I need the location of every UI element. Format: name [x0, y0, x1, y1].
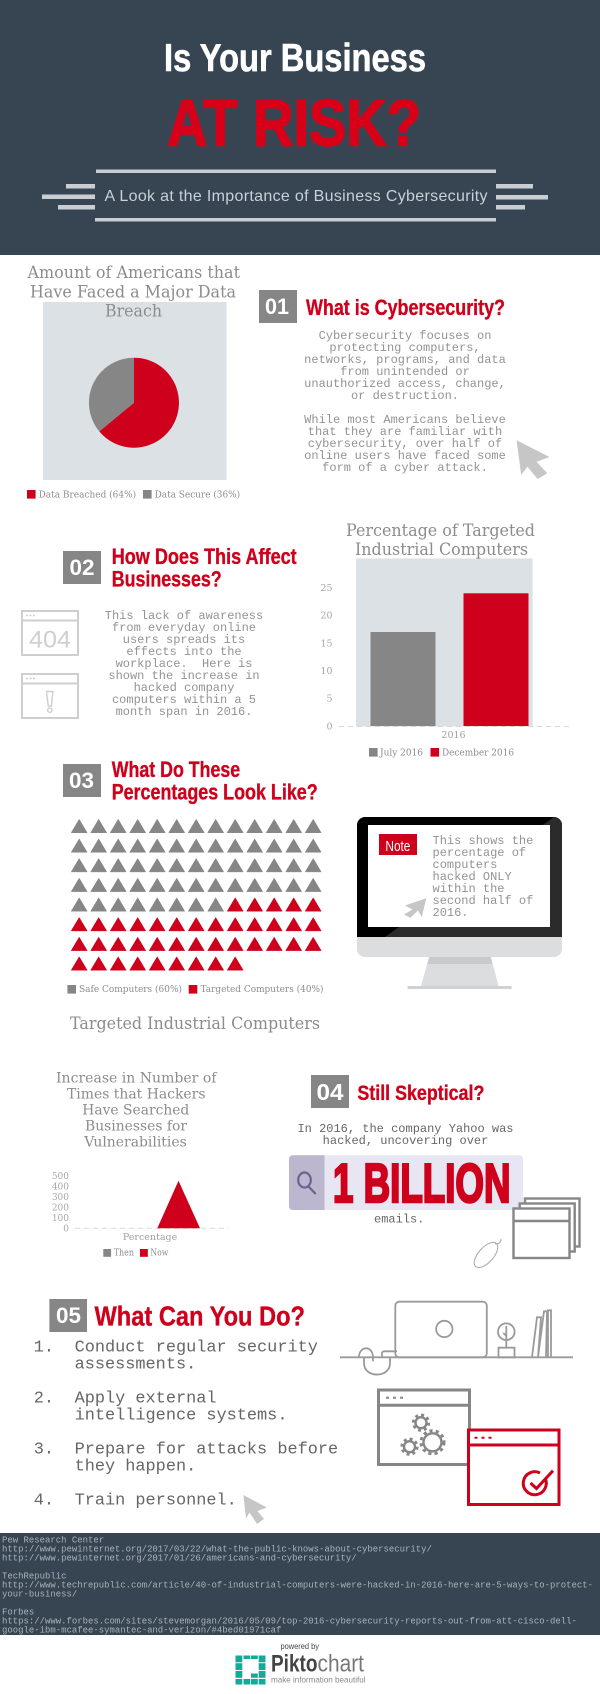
triangle chart title: Businesses for: [85, 1119, 187, 1135]
illustration: settings window: [378, 1390, 470, 1464]
icon: stacked windows: [514, 1198, 580, 1258]
triangle chart x label: Percentage: [123, 1232, 178, 1243]
monitor chin: [357, 937, 562, 957]
section 01 body text: While most Americans believe: [304, 413, 506, 427]
section 01 body text: [304, 329, 506, 475]
source list: https://www.forbes.com/sites/stevemorgan/2016/05/09/top-2016-cybersecurity-reports-out-from-att-cisco-dell-: [2, 1616, 577, 1626]
piktochart logo: chart: [318, 1651, 364, 1678]
note text: This shows the: [432, 834, 533, 848]
note text: within the: [432, 882, 505, 896]
section 03 heading: [63, 757, 318, 804]
chart background: [43, 302, 226, 480]
section 01 body text: form of a cyber attack.: [322, 461, 488, 475]
section 04 intro text: hacked, uncovering over: [323, 1134, 488, 1148]
y axis labels: 10: [320, 666, 332, 677]
title line 1: Is Your Business: [164, 37, 426, 80]
section 01 heading: [259, 290, 505, 323]
section 01 body text: networks, programs, and data: [304, 353, 506, 367]
section 01 body text: from unintended or: [340, 365, 470, 379]
piktochart logo: [236, 1642, 366, 1685]
pie chart title: Breach: [105, 302, 162, 320]
note text: 2016.: [432, 906, 469, 920]
section 02 body text: from everyday online: [112, 621, 256, 635]
section 02 body text: shown the increase in: [108, 669, 260, 683]
note text: second half of: [432, 894, 533, 908]
section 04 intro text: In 2016, the company Yahoo was: [297, 1122, 514, 1136]
source list: http://www.pewinternet.org/2017/01/26/americans-and-cybersecurity/: [2, 1553, 357, 1563]
triangle chart axis labels: 300: [52, 1193, 69, 1203]
pie chart panel: data breaches: [27, 263, 240, 500]
pie legend: Data Breached (64%): [39, 490, 136, 500]
illustration: laptop on desk: [340, 1302, 573, 1375]
section 02 body text: users spreads its: [123, 633, 245, 647]
section 04 heading: Still Skeptical?: [357, 1082, 484, 1105]
section 01 body text: online users have faced some: [304, 449, 506, 463]
bar chart title: Percentage of Targeted: [346, 521, 535, 541]
logo mark: [236, 1656, 266, 1684]
header banner: [0, 0, 600, 255]
action list: Prepare for attacks before: [75, 1441, 338, 1460]
icon: computer mouse: [470, 1238, 502, 1272]
pie legend: [27, 490, 240, 500]
triangle chart title: Increase in Number of: [56, 1071, 218, 1087]
action list: they happen.: [75, 1458, 196, 1477]
pie chart title: Amount of Americans that: [27, 263, 240, 282]
source list: http://www.pewinternet.org/2017/03/22/what-the-public-knows-about-cybersecurity/: [2, 1544, 432, 1554]
action list: 4.: [34, 1492, 54, 1511]
triangle chart axis labels: 0: [63, 1224, 69, 1234]
action list: assessments.: [75, 1356, 196, 1375]
triangle chart: hacker searches: [52, 1071, 229, 1259]
section 05 heading: What Can You Do?: [94, 1300, 305, 1331]
logo tagline: make information beautiful: [271, 1675, 366, 1685]
source list: TechRepublic: [2, 1571, 66, 1581]
section 03 heading: What Do These: [112, 757, 240, 782]
bar chart legend: [369, 748, 514, 758]
triangle chart title: Have Searched: [82, 1103, 189, 1119]
note text: [432, 834, 533, 920]
action list: intelligence systems.: [75, 1407, 287, 1426]
bar chart background: [356, 558, 533, 726]
action list: Apply external: [75, 1390, 217, 1409]
triangle chart axis labels: 400: [52, 1182, 69, 1192]
section 01 body text: cybersecurity, over half of: [308, 437, 502, 451]
y axis labels: [320, 583, 332, 732]
triangle bar: [157, 1181, 200, 1228]
section 01 body text: or destruction.: [351, 389, 459, 403]
subtitle frame stripes: [42, 170, 548, 222]
section 01 body text: that they are familiar with: [308, 425, 502, 439]
triangle chart title: Times that Hackers: [67, 1087, 206, 1103]
source list: google-ibm-mcafee-symantec-and-verizon/#4bed01971caf: [2, 1625, 281, 1635]
section 05 heading: 05: [56, 1303, 81, 1328]
section 02 body text: effects into the: [126, 645, 242, 659]
source list: Pew Research Center: [2, 1535, 104, 1545]
note text: hacked ONLY: [432, 870, 512, 884]
section 01 body text: protecting computers,: [329, 341, 481, 355]
action list: Conduct regular security: [75, 1339, 318, 1358]
monitor screen bezel: [357, 817, 562, 937]
triangle chart title: [56, 1071, 218, 1151]
section 05 heading: [49, 1299, 305, 1332]
pie legend: Data Secure (36%): [155, 490, 240, 500]
monitor with note: [357, 817, 562, 989]
section 01 body text: unauthorized access, change,: [304, 377, 506, 391]
section 04 heading: [311, 1075, 484, 1108]
section 03 heading: Percentages Look Like?: [112, 779, 318, 804]
triangle chart axis labels: [52, 1172, 69, 1234]
action list: 3.: [34, 1441, 54, 1460]
section 02 heading: [63, 544, 297, 592]
pictogram chart title: Targeted Industrial Computers: [70, 1014, 320, 1034]
section 02 heading: How Does This Affect: [112, 544, 297, 569]
y axis labels: 5: [326, 694, 332, 704]
sources footer: [0, 1533, 600, 1635]
action list: 2.: [34, 1390, 54, 1409]
bars: [370, 593, 528, 726]
monitor stand: [408, 956, 512, 989]
icon: 404 window: [22, 611, 78, 655]
section 02 body text: computers within a 5: [112, 693, 256, 707]
triangle chart axis labels: 200: [52, 1204, 69, 1214]
section 02 body text: [105, 609, 263, 719]
section 04 heading: 04: [316, 1079, 344, 1105]
triangle chart axis labels: 500: [52, 1172, 69, 1182]
section 01 body text: Cybersecurity focuses on: [319, 329, 491, 343]
pictogram chart: triangles: [71, 819, 321, 970]
action list: 1.: [34, 1339, 54, 1358]
pictogram legend: Targeted Computers (40%): [200, 984, 324, 995]
section 01 heading: 01: [265, 294, 289, 319]
bar chart title: Industrial Computers: [355, 540, 528, 560]
icon: small cursor: [404, 898, 426, 918]
logo wordmark: Pikto: [271, 1651, 318, 1678]
action list: [34, 1339, 338, 1511]
triangle chart legend: Now: [150, 1249, 169, 1259]
action list: Train personnel.: [75, 1492, 237, 1511]
triangle chart axis labels: 100: [52, 1214, 69, 1224]
pie chart title: [27, 263, 240, 320]
icon: warning window: [22, 674, 78, 718]
bar chart legend: December 2016: [442, 748, 514, 758]
source list: Forbes: [2, 1607, 34, 1617]
check mark: [523, 1471, 553, 1495]
triangle chart legend: Then: [114, 1249, 134, 1259]
section 02 heading: 02: [70, 555, 94, 580]
icon: 404 window: 404: [29, 626, 71, 654]
section 03 heading: 03: [69, 768, 94, 793]
gears: [402, 1415, 444, 1454]
y axis labels: 0: [326, 722, 332, 732]
note badge: [379, 834, 417, 855]
triangle chart title: Vulnerabilities: [83, 1135, 187, 1151]
section 02 body text: This lack of awareness: [105, 609, 263, 623]
bar chart legend: July 2016: [379, 748, 423, 758]
subtitle: A Look at the Importance of Business Cybersecurity: [104, 188, 488, 205]
section 02 body text: hacked company: [134, 681, 234, 695]
bar chart: targeted industrial computers: [320, 521, 572, 758]
note text: computers: [432, 858, 497, 872]
icon: magnifier: [298, 1172, 316, 1194]
pictogram legend: Safe Computers (60%): [79, 984, 182, 995]
source list: your-business/: [2, 1589, 77, 1599]
big number: 1 BILLION: [333, 1152, 510, 1214]
emails label: emails.: [374, 1213, 424, 1227]
section 02 body text: workplace. Here is: [116, 657, 252, 671]
source list: http://www.techrepublic.com/article/40-of-industrial-computers-were-hacked-in-2016-here-are-5-ways-to-protect-: [2, 1580, 593, 1590]
x axis label: 2016: [441, 730, 466, 741]
pictogram legend: [67, 984, 324, 995]
icon: cursor arrow: [517, 440, 550, 479]
illustration: approval window: [468, 1430, 559, 1504]
section 02 heading: Businesses?: [112, 566, 222, 592]
pie slices: [89, 358, 179, 448]
note text: percentage of: [432, 846, 526, 860]
piktochart logo: powered by: [280, 1642, 319, 1651]
icon: list cursor: [243, 1495, 267, 1524]
pie chart title: Have Faced a Major Data: [30, 282, 236, 302]
1 billion search bar: [289, 1152, 523, 1214]
section 04 intro text: [297, 1122, 514, 1148]
y axis labels: 25: [320, 583, 332, 594]
section 01 heading: What is Cybersecurity?: [306, 295, 505, 320]
section 02 body text: month span in 2016.: [116, 705, 252, 719]
y axis labels: 15: [320, 638, 332, 650]
triangle chart legend: [103, 1249, 169, 1259]
source list: [2, 1535, 593, 1635]
title line 2: AT RISK?: [167, 86, 421, 160]
note badge: Note: [385, 838, 410, 855]
y axis labels: 20: [320, 610, 332, 622]
bar chart title: [346, 521, 535, 560]
